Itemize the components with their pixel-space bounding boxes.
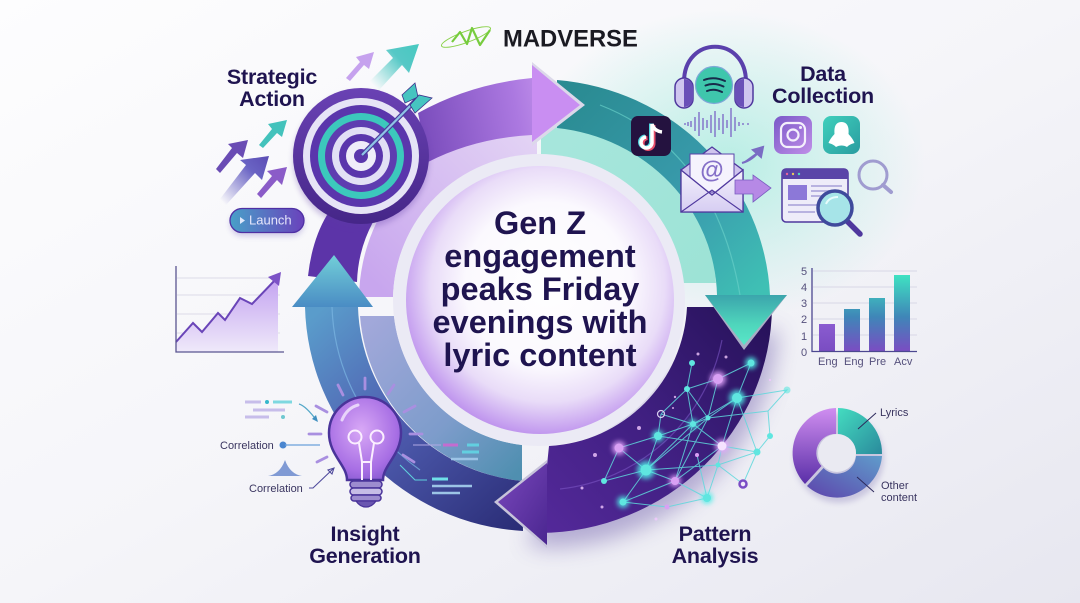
label: Correlation with peak [249,460,334,495]
chart: donut: Other [881,480,909,492]
arc: strategic to data [418,78,532,162]
icon: target with arrow [293,83,432,228]
central statement: peaks Friday [441,271,639,307]
arrowhead: blue [292,255,373,307]
icon: headphones with Spotify [675,47,753,108]
central statement: Gen Z [494,205,586,241]
button: Launch: Launch [249,212,292,228]
label: Correlation with peak: Correlation [249,483,303,495]
soft shadow under ring [526,328,778,548]
arrows: upward momentum [216,44,419,205]
logo: Madverse: MADVERSE [503,26,638,52]
chart: bar chart: 3 [801,298,807,310]
label: Correlation with dot: Correlation [220,440,274,452]
cycle ring [292,62,787,548]
chart: donut: Lyrics [880,407,909,419]
arrowhead: purple [532,62,585,146]
chart: bar chart: Acv [894,356,913,368]
label: Strategic Action [227,65,317,111]
chart: donut [793,407,917,504]
icon: TikTok [631,116,671,156]
label: Correlation with dot [220,440,320,452]
chart: bar chart: 2 [801,314,807,326]
icon: email envelope: @ [700,157,724,184]
arrow: email to Instagram [742,147,763,163]
icon: email envelope [681,147,743,212]
arc: insight to strategic [305,307,523,531]
data fragments right of bulb [400,445,479,493]
chart: bar chart: Eng [818,356,838,368]
inner band tint: insight [360,316,522,481]
arc: data to pattern [557,80,770,295]
chart: bar chart: 1 [801,331,807,343]
chart: bar chart: Eng [844,356,864,368]
label: Data Collection: Data [800,62,847,86]
label: Data Collection: Collection [772,84,874,108]
chart: bar chart [801,266,917,368]
icon: magnifier [859,161,891,192]
logo: Madverse [440,23,638,52]
chart: bar chart: Pre [869,356,886,368]
label: Strategic Action: Action [239,87,305,111]
inner band tint: strategic to data [359,120,537,297]
label: Data Collection [772,62,874,108]
label: Pattern Analysis: Pattern [679,522,751,546]
arrow: email to browser [735,175,771,202]
chart: rising line [176,266,284,352]
arrowhead: teal [705,295,787,350]
central statement [433,205,647,373]
label: Insight Generation [309,522,421,568]
icon: Instagram [774,116,812,154]
arrowhead: dark purple [494,460,547,548]
central statement: engagement [444,238,636,274]
chart: donut: content [881,492,917,504]
label: Pattern Analysis: Analysis [672,544,759,568]
icon: light bulb [309,378,422,507]
icon: browser window with magnifier [782,169,860,234]
data fragments left of bulb [245,400,318,422]
chart: bar chart: 5 [801,266,807,278]
network: pattern analysis [580,352,790,520]
label: Strategic Action: Strategic [227,65,317,89]
label: Insight Generation: Insight [330,522,400,546]
icon: Snapchat [823,116,860,154]
button: Launch [230,208,304,236]
chart: bar chart: 0 [801,347,807,359]
arc: pattern to insight [540,307,772,533]
central statement: evenings with [433,304,647,340]
central statement: lyric content [443,337,637,373]
inner band tint: data collection [541,120,716,283]
central circle [393,154,685,446]
label: Pattern Analysis [672,522,759,568]
arc: connector under target [308,215,373,282]
icon: sound wave [684,108,749,137]
chart: bar chart: 4 [801,282,807,294]
label: Insight Generation: Generation [309,544,421,568]
